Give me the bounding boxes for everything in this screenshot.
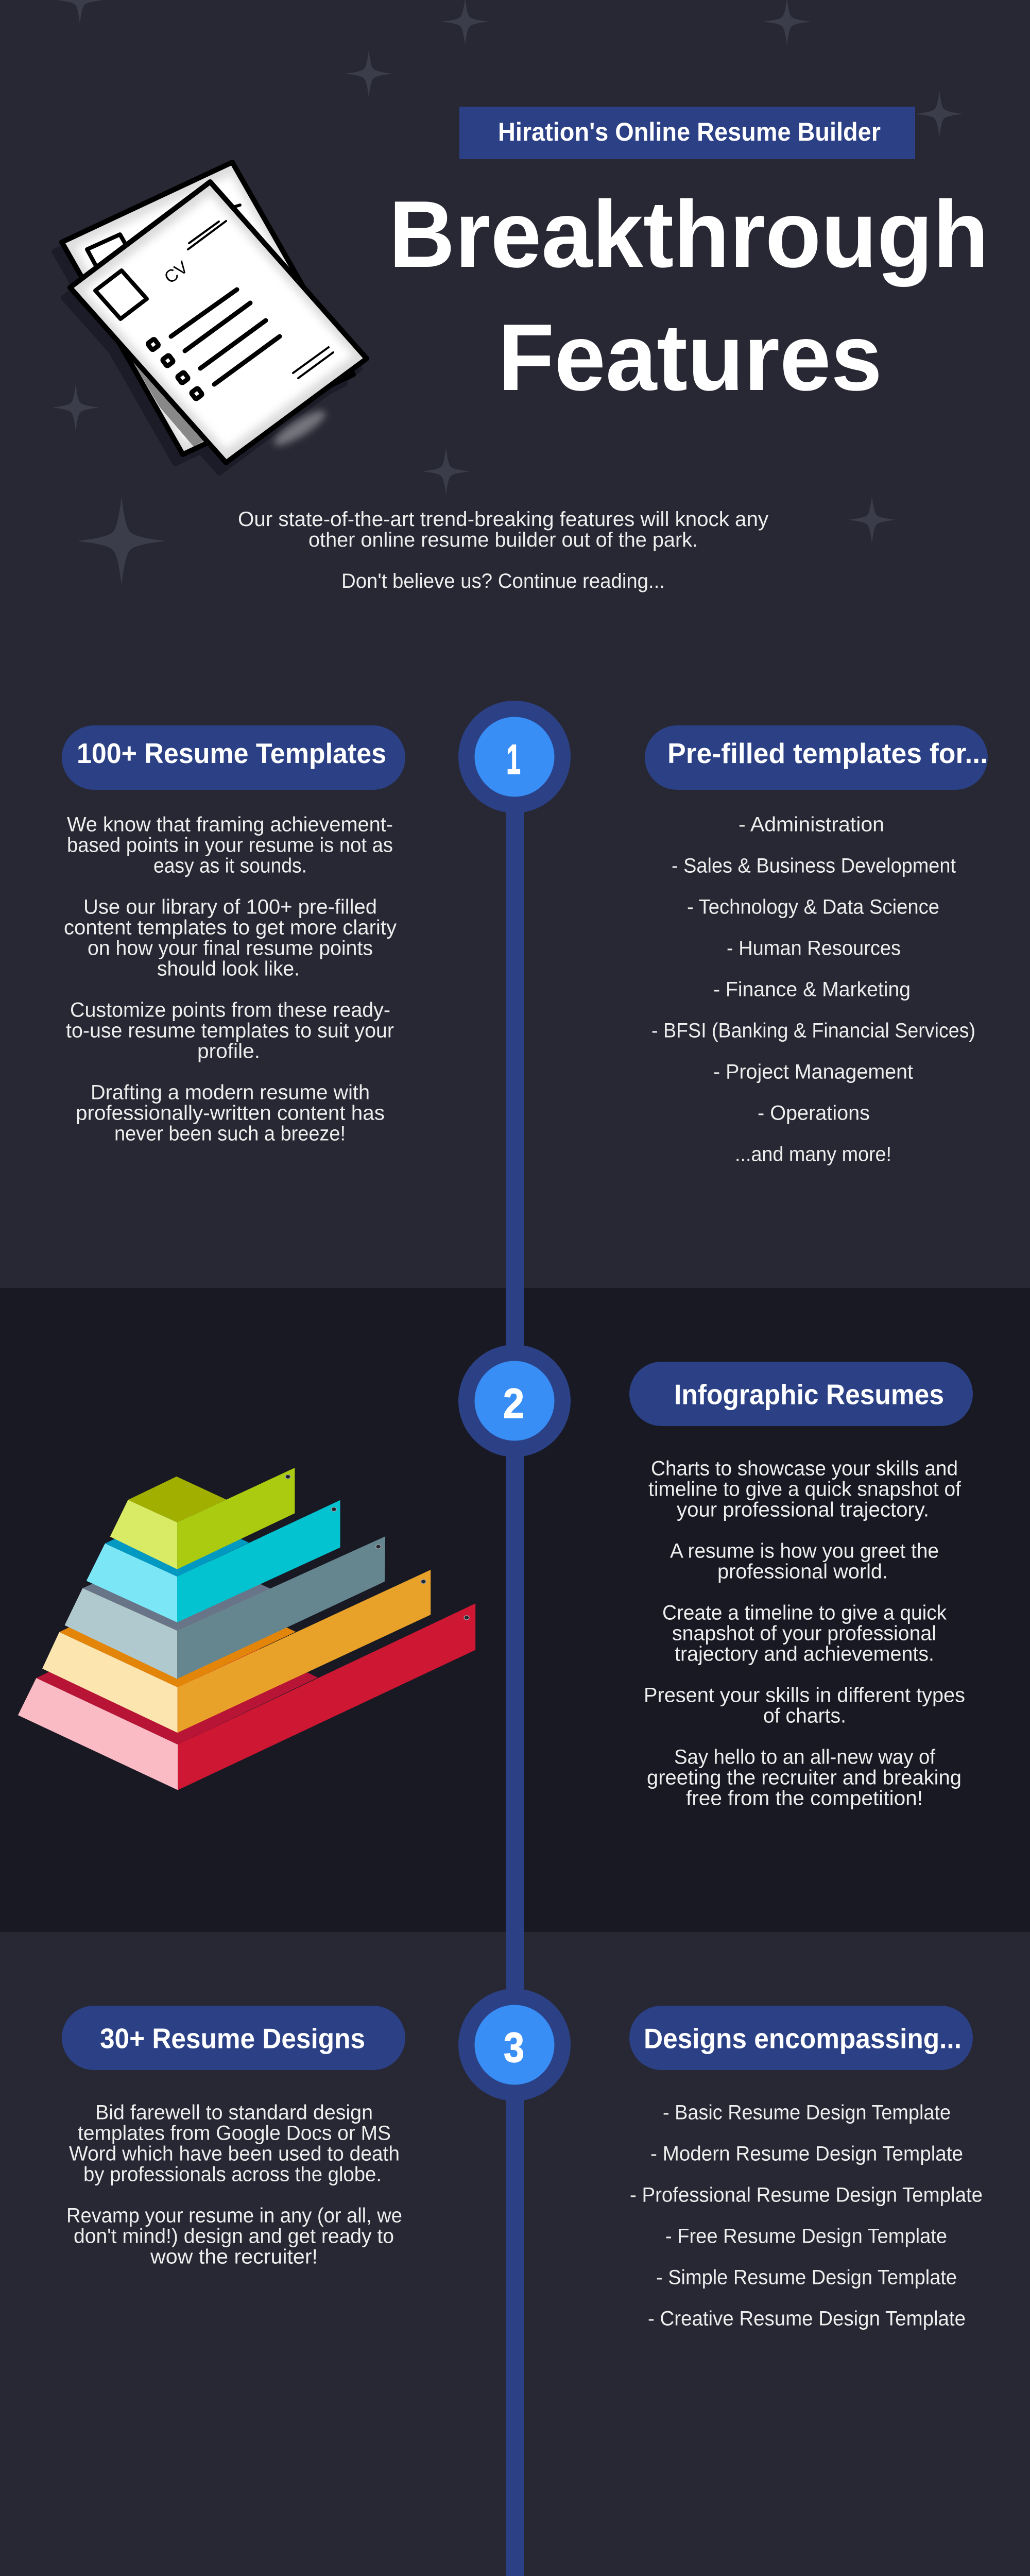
text: design template list: - Modern Resume Design Template bbox=[650, 2142, 963, 2165]
heading pill: Designs encompassing: Designs encompassing... bbox=[644, 2023, 962, 2055]
text: feature 2 description: Charts to showcase your skills and bbox=[651, 1457, 958, 1480]
marker 1 bbox=[458, 701, 571, 813]
text: feature 3 description bbox=[66, 2101, 402, 2268]
text: feature 3 description: templates from Google Docs or MS bbox=[78, 2122, 391, 2144]
marker 3 bbox=[458, 1989, 571, 2101]
text: feature 1 description: should look like. bbox=[157, 957, 300, 980]
heading pill: 100+ Resume Templates: 100+ Resume Templates bbox=[77, 737, 386, 769]
band: header and feature 1 background bbox=[0, 0, 1030, 1288]
band: feature 2 background bbox=[0, 1288, 1030, 1932]
text: feature 3 description: by professionals across the globe. bbox=[83, 2163, 382, 2185]
text: design template list: - Creative Resume Design Template bbox=[648, 2307, 966, 2330]
text: feature 2 description: greeting the recruiter and breaking bbox=[647, 1766, 962, 1789]
heading pill: Infographic Resumes: Infographic Resumes bbox=[674, 1379, 944, 1411]
text: design template list: - Professional Resume Design Template bbox=[630, 2183, 983, 2206]
text: feature 2 description: professional world. bbox=[717, 1560, 888, 1583]
icon: CV documents: CV bbox=[161, 257, 192, 287]
text: feature 2 description bbox=[644, 1457, 965, 1809]
text: feature 2 description: A resume is how you greet the bbox=[670, 1539, 939, 1562]
text: feature 1 description: easy as it sounds. bbox=[153, 854, 307, 877]
marker 2 bbox=[458, 1345, 571, 1457]
text: feature 2 description: snapshot of your professional bbox=[672, 1622, 936, 1645]
heading pill: Designs encompassing bbox=[629, 2006, 973, 2070]
text: template categories list: - Sales & Business Development bbox=[672, 854, 956, 877]
text: template categories list: - Operations bbox=[758, 1101, 870, 1124]
main title: Breakthrough bbox=[389, 181, 989, 287]
intro text: Our state-of-the-art trend-breaking features will knock any bbox=[238, 508, 768, 531]
text: template categories list bbox=[651, 813, 975, 1165]
text: feature 2 description: free from the competition! bbox=[686, 1787, 923, 1809]
text: feature 3 description: Revamp your resume in any (or all, we bbox=[66, 2204, 402, 2227]
heading pill: 100+ Resume Templates bbox=[62, 725, 405, 790]
heading pill: Pre-filled templates for: Pre-filled templates for... bbox=[667, 737, 988, 769]
text: feature 2 description: your professional trajectory. bbox=[677, 1498, 929, 1521]
text: feature 2 description: Present your skills in different types bbox=[644, 1684, 965, 1706]
heading pill: 30+ Resume Designs: 30+ Resume Designs bbox=[100, 2023, 365, 2055]
text: template categories list: - Administration bbox=[739, 813, 884, 836]
header banner: Hiration's Online Resume Builder bbox=[498, 117, 881, 146]
main title bbox=[389, 181, 989, 410]
text: design template list bbox=[630, 2101, 983, 2330]
main title: Features bbox=[498, 304, 882, 410]
text: feature 1 description: based points in your resume is not as bbox=[67, 834, 393, 856]
text: template categories list: - Human Resources bbox=[727, 937, 901, 959]
text: template categories list: - Finance & Marketing bbox=[713, 978, 911, 1001]
text: feature 1 description: professionally-written content has bbox=[76, 1101, 385, 1124]
text: feature 1 description: profile. bbox=[197, 1040, 260, 1062]
band: feature 3 background bbox=[0, 1932, 1030, 2576]
text: feature 1 description: Customize points from these ready- bbox=[70, 998, 390, 1021]
icon: CV documents bbox=[54, 162, 367, 473]
text: feature 1 description: Drafting a modern resume with bbox=[91, 1081, 370, 1104]
text: template categories list: ...and many more! bbox=[735, 1143, 891, 1165]
text: feature 2 description: trajectory and achievements. bbox=[675, 1642, 934, 1665]
header banner bbox=[459, 107, 915, 159]
background sparkle stars bbox=[52, 0, 963, 585]
intro text: Don't believe us? Continue reading... bbox=[341, 570, 665, 592]
text: feature 3 description: Word which have been used to death bbox=[69, 2142, 400, 2165]
text: feature 2 description: Say hello to an all-new way of bbox=[674, 1745, 936, 1768]
text: feature 1 description: We know that framing achievement- bbox=[67, 813, 393, 836]
marker 3: 3 bbox=[504, 2024, 524, 2071]
marker 1: 1 bbox=[506, 736, 521, 783]
text: feature 3 description: don't mind!) design and get ready to bbox=[74, 2225, 394, 2247]
text: feature 1 description: to-use resume templates to suit your bbox=[66, 1019, 394, 1042]
heading pill: Infographic Resumes bbox=[629, 1362, 973, 1426]
text: feature 2 description: of charts. bbox=[763, 1704, 846, 1727]
timeline bar bbox=[506, 773, 524, 2576]
intro text bbox=[238, 508, 768, 592]
marker 2: 2 bbox=[503, 1380, 524, 1427]
text: feature 1 description: Use our library of 100+ pre-filled bbox=[83, 895, 377, 918]
text: feature 1 description: on how your final resume points bbox=[88, 937, 373, 959]
text: design template list: - Basic Resume Design Template bbox=[663, 2101, 951, 2124]
text: design template list: - Free Resume Design Template bbox=[665, 2225, 947, 2247]
text: feature 3 description: Bid farewell to standard design bbox=[95, 2101, 373, 2124]
chart: stacked pyramid bbox=[18, 1468, 475, 1790]
text: template categories list: - Project Management bbox=[713, 1060, 913, 1083]
text: feature 1 description: never been such a breeze! bbox=[114, 1122, 346, 1145]
text: feature 2 description: timeline to give a quick snapshot of bbox=[648, 1478, 962, 1500]
text: feature 1 description bbox=[64, 813, 397, 1145]
text: template categories list: - BFSI (Banking & Financial Services) bbox=[651, 1019, 975, 1042]
heading pill: 30+ Resume Designs bbox=[62, 2006, 405, 2070]
text: design template list: - Simple Resume Design Template bbox=[656, 2266, 957, 2289]
intro text: other online resume builder out of the park. bbox=[308, 529, 698, 551]
text: feature 1 description: content templates to get more clarity bbox=[64, 916, 397, 939]
text: feature 3 description: wow the recruiter! bbox=[150, 2245, 318, 2268]
text: template categories list: - Technology & Data Science bbox=[687, 895, 939, 918]
text: feature 2 description: Create a timeline to give a quick bbox=[662, 1601, 947, 1624]
heading pill: Pre-filled templates for bbox=[645, 725, 988, 790]
